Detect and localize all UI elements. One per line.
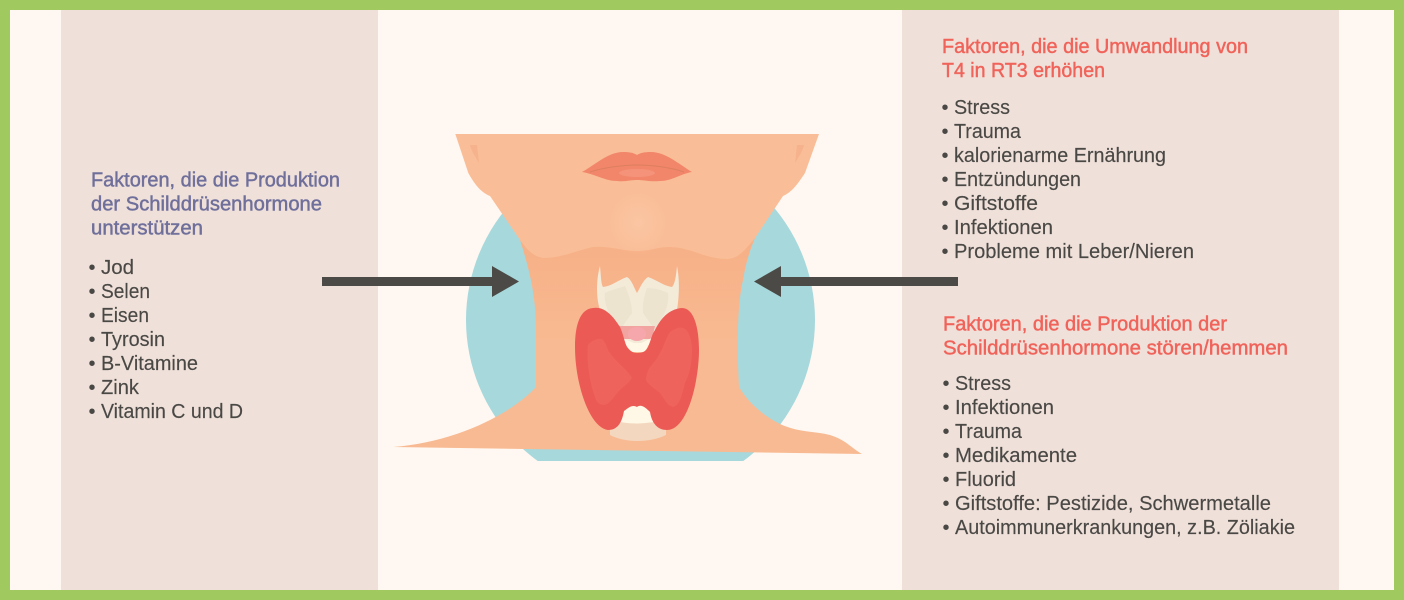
list: T4 to RT3 conversion: Probleme mit Leber/Nieren — [954, 241, 1194, 263]
list: supporting factors: • — [88, 257, 96, 279]
list: disrupting factors: • — [942, 445, 950, 467]
ear right — [795, 145, 804, 163]
list: disrupting factors: • — [942, 517, 950, 539]
heading: supporting factors: der Schilddrüsenhormone — [91, 194, 322, 216]
list: disrupting factors: • — [942, 421, 950, 443]
heading: supporting factors — [91, 170, 340, 240]
list: disrupting factors: Fluorid — [955, 469, 1016, 491]
list: disrupting factors: • — [942, 373, 950, 395]
panel: right background — [902, 10, 1339, 590]
list: T4 to RT3 conversion — [942, 97, 1194, 263]
list: T4 to RT3 conversion: kalorienarme Ernährung — [954, 145, 1166, 167]
list: supporting factors: • — [88, 377, 96, 399]
heading: T4 to RT3 conversion — [942, 36, 1248, 82]
arrow: left pointing right — [322, 266, 519, 297]
list: supporting factors: • — [88, 281, 96, 303]
list: supporting factors — [88, 257, 243, 423]
heading: supporting factors: Faktoren, die die Produktion — [91, 170, 340, 192]
list: disrupting factors: Medikamente — [955, 445, 1077, 467]
list: disrupting factors: • — [942, 469, 950, 491]
heading: supporting factors: unterstützen — [91, 218, 203, 240]
list: T4 to RT3 conversion: • — [942, 241, 949, 263]
list: T4 to RT3 conversion: • — [942, 145, 949, 167]
list: supporting factors: Zink — [101, 377, 140, 399]
lips — [582, 152, 692, 181]
ear left — [470, 145, 479, 163]
heading: T4 to RT3 conversion: Faktoren, die die Umwandlung von — [942, 36, 1248, 58]
neck and shoulders — [393, 238, 862, 454]
panel: left background — [61, 10, 378, 590]
list: disrupting factors: • — [942, 397, 950, 419]
list: T4 to RT3 conversion: • — [942, 193, 949, 215]
lower cartilage — [610, 421, 666, 441]
face and jaw — [455, 134, 819, 259]
list: disrupting factors: Autoimmunerkrankungen, z.B. Zöliakie — [955, 517, 1295, 539]
list: supporting factors: • — [88, 353, 96, 375]
blue background circle — [466, 208, 815, 461]
list: supporting factors: • — [88, 329, 96, 351]
chin highlight — [608, 191, 668, 255]
list: supporting factors: Vitamin C und D — [101, 401, 243, 423]
list: disrupting factors: Giftstoffe: Pestizide, Schwermetalle — [955, 493, 1271, 515]
thyroid cartilage — [597, 266, 679, 352]
list: supporting factors: Eisen — [101, 305, 149, 327]
thyroid gland — [575, 308, 699, 430]
list: supporting factors: Jod — [101, 257, 134, 279]
list: T4 to RT3 conversion: Giftstoffe — [954, 193, 1038, 215]
list: supporting factors: Tyrosin — [101, 329, 165, 351]
heading: disrupting factors: Schilddrüsenhormone stören/hemmen — [943, 338, 1288, 360]
list: disrupting factors: Trauma — [955, 421, 1023, 443]
list: T4 to RT3 conversion: • — [942, 169, 949, 191]
list: disrupting factors: Infektionen — [955, 397, 1054, 419]
heading: disrupting factors — [943, 314, 1288, 360]
list: disrupting factors — [942, 373, 1295, 539]
list: disrupting factors: • — [942, 493, 950, 515]
list: supporting factors: Selen — [101, 281, 150, 303]
list: T4 to RT3 conversion: • — [942, 217, 949, 239]
list: supporting factors: • — [88, 401, 96, 423]
list: T4 to RT3 conversion: • — [942, 121, 949, 143]
illustration: neck with thyroid — [393, 134, 862, 494]
list: T4 to RT3 conversion: Entzündungen — [954, 169, 1081, 191]
list: T4 to RT3 conversion: • — [942, 97, 949, 119]
arrow: right pointing left — [754, 266, 958, 297]
list: supporting factors: • — [88, 305, 96, 327]
list: T4 to RT3 conversion: Stress — [954, 97, 1010, 119]
cream tracheal ring — [620, 405, 654, 424]
heading: disrupting factors: Faktoren, die die Produktion der — [943, 314, 1227, 336]
list: T4 to RT3 conversion: Infektionen — [954, 217, 1053, 239]
heading: T4 to RT3 conversion: T4 in RT3 erhöhen — [942, 60, 1105, 82]
list: T4 to RT3 conversion: Trauma — [954, 121, 1022, 143]
list: supporting factors: B-Vitamine — [101, 353, 198, 375]
list: disrupting factors: Stress — [955, 373, 1011, 395]
